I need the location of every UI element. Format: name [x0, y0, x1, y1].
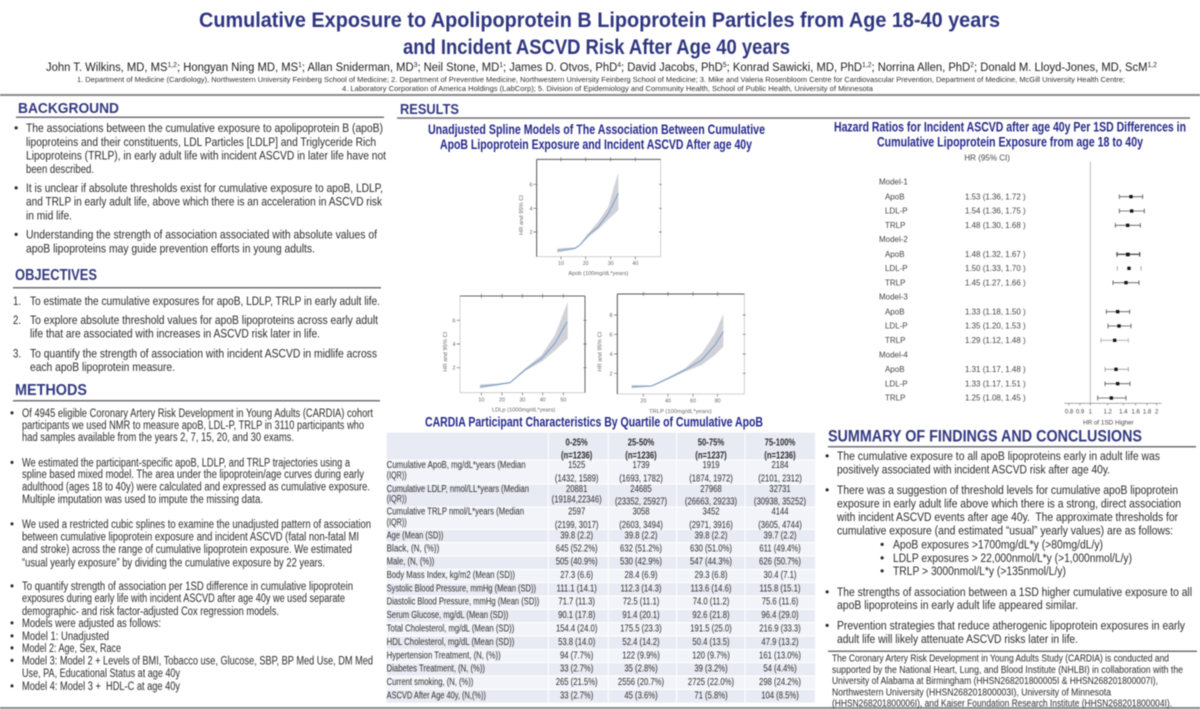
chart: forest plot of hazard ratios: [879, 153, 1162, 426]
table: participant characteristics: (n=1236): [561, 449, 592, 461]
text block: objectives list: 1.: [13, 294, 21, 308]
chart: forest plot of hazard ratios: 1.48 (1.32, 1.67 ): [965, 250, 1026, 259]
text block: methods bullets: To quantify strength of association per 1SD difference in cumulative lipoprotein: [22, 581, 353, 593]
chart: LDLp spline: 2: [453, 366, 456, 372]
authors: 1,2: [167, 62, 177, 69]
chart: forest plot of hazard ratios: 1.35 (1.20, 1.53 ): [965, 322, 1026, 331]
table: participant characteristics: Cumulative ApoB, mg/dL*years (Median: [387, 460, 526, 471]
table: participant characteristics: 120 (9.7%): [692, 649, 730, 661]
text block: objectives list: 2.: [13, 313, 21, 327]
table: participant characteristics: (2101, 2312): [758, 472, 802, 484]
authors: ; Norrina Allen, PhD: [872, 62, 970, 74]
panel: background: [14, 101, 387, 256]
text block: methods bullets: •: [10, 681, 14, 693]
table: participant characteristics: Total Cholesterol, mg/dL (Mean (SD)): [387, 623, 514, 634]
text block: methods bullets: •: [10, 519, 14, 531]
chart: TRLP spline: 20: [640, 399, 646, 405]
text block: objectives list: life that are associated with increases in ASCVD risk later in life.: [30, 326, 320, 340]
chart: TRLP spline: 2: [610, 371, 613, 377]
table: participant characteristics: 27.3 (6.6): [560, 569, 593, 580]
chart: TRLP spline: TRLP (100mg/dL*years): [649, 409, 712, 415]
authors: 2: [970, 62, 974, 69]
table: participant characteristics: 39.8 (2.2): [695, 529, 727, 541]
table: participant characteristics: (n=1237): [695, 449, 727, 461]
table: participant characteristics: 33 (2.7%): [560, 690, 593, 701]
chart: forest plot of hazard ratios: 1.54 (1.36, 1.75 ): [965, 207, 1026, 216]
chart: ApoB spline: [519, 157, 662, 277]
panel: summary and conclusions: [825, 428, 1197, 709]
table: participant characteristics: (30938, 35252): [754, 496, 806, 507]
text block: methods bullets: Of 4945 eligible Coronary Artery Risk Development in Young Adults (CARDIA) cohort: [22, 408, 374, 420]
panel: results: [387, 102, 1190, 703]
text block: summary bullets: positively associated with incident ASCVD risk after age 40y.: [837, 462, 1110, 476]
table: participant characteristics: (1432, 1589): [555, 472, 598, 484]
table: participant characteristics: Black, (N, (%)): [387, 543, 439, 554]
heading: objectives: OBJECTIVES: [15, 267, 97, 284]
table: participant characteristics: 630 (51.0%): [690, 542, 732, 554]
text block: summary bullets: •: [825, 483, 829, 497]
authors: 1: [499, 62, 503, 69]
table: participant characteristics: 611 (49.4%): [759, 542, 801, 554]
text block: background bullets: Understanding the strength of association associated with absolute values of: [26, 228, 378, 242]
chart: TRLP spline: HR and 95% CI: [598, 332, 604, 372]
text block: methods bullets: and stroke) across the range of cumulative lipoprotein exposure. We estimated: [22, 544, 352, 556]
table: participant characteristics: (2971, 3916): [689, 519, 733, 530]
chart: forest plot of hazard ratios: LDL-P: [885, 379, 908, 388]
text block: summary bullets: LDLP exposures > 22,000nmol/L*y (>1,000nmol/L/y): [893, 551, 1132, 565]
subheading: spline models: Unadjusted Spline Models of The Association Between Cumulative: [428, 122, 765, 137]
chart: forest plot of hazard ratios: ApoB: [885, 192, 905, 201]
chart: forest plot of hazard ratios: HR (95% CI): [964, 153, 1010, 162]
authors: ; Hongyan Ning MD, MS: [177, 62, 298, 74]
table: participant characteristics: 71 (5.8%): [694, 690, 728, 701]
table: participant characteristics: 216.9 (33.3): [759, 622, 801, 634]
authors: 1,2: [1147, 62, 1157, 69]
chart: forest plot of hazard ratios: 1.48 (1.30, 1.68 ): [965, 221, 1026, 230]
table: participant characteristics: Cumulative TRLP nmol/L*years (Median: [387, 507, 524, 518]
chart: ApoB spline: 6: [530, 182, 533, 188]
text block: summary bullets: •: [825, 618, 829, 632]
chart: LDLp spline: 40: [540, 397, 546, 403]
chart: forest plot of hazard ratios: 1.50 (1.33, 1.70 ): [965, 264, 1026, 273]
table: participant characteristics: 50-75%: [698, 437, 724, 448]
chart: TRLP spline: 8: [610, 313, 613, 319]
table: participant characteristics: 645 (52.2%): [556, 542, 598, 554]
table: participant characteristics: 3452: [702, 506, 720, 517]
chart: forest plot of hazard ratios: 1.31 (1.17, 1.48 ): [965, 365, 1026, 374]
authors: 1,2: [862, 62, 872, 69]
chart: TRLP spline: 6: [610, 332, 613, 338]
chart: forest plot of hazard ratios: Model-3: [879, 293, 908, 302]
text block: methods bullets: between cumulative lipoprotein exposure and incident ASCVD (fatal non-fatal MI: [22, 532, 359, 544]
table: participant characteristics: 71.7 (11.3): [558, 596, 595, 607]
text block: methods bullets: •: [10, 618, 14, 630]
text block: summary bullets: ApoB exposures >1700mg/dL*y (>80mg/dL/y): [893, 538, 1103, 552]
chart: forest plot of hazard ratios: TRLP: [885, 394, 905, 403]
table: participant characteristics: 28.4 (6.9): [625, 569, 657, 580]
table: participant characteristics: Cumulative LDLP, nmol/LL*years (Median: [387, 484, 529, 495]
text block: background bullets: apoB lipoproteins may guide prevention efforts in young adults.: [26, 242, 315, 256]
heading: results: RESULTS: [400, 102, 459, 118]
heading: background: BACKGROUND: [18, 101, 119, 117]
chart: forest plot of hazard ratios: 1.25 (1.08, 1.45 ): [965, 394, 1026, 403]
text block: objectives list: 3.: [13, 346, 21, 360]
text block: methods bullets: •: [10, 656, 14, 668]
chart: forest plot of hazard ratios: Model-2: [879, 235, 908, 244]
text block: summary bullets: •: [825, 449, 829, 463]
chart: ApoB spline: HR and 95% CI: [519, 195, 525, 235]
chart: LDLp spline: 50: [560, 397, 566, 403]
chart: forest plot of hazard ratios: ApoB: [885, 307, 905, 316]
chart: LDLp spline: 4: [453, 342, 456, 348]
text block: methods bullets: participants we used NMR to measure apoB, LDL-P, TRLP in 3110 participants who: [22, 420, 364, 432]
chart: TRLP spline: 80: [715, 399, 721, 405]
table: participant characteristics: (19184,22346): [552, 493, 602, 505]
affiliations: [77, 75, 1125, 93]
table: participant characteristics: 54 (4.4%): [763, 663, 797, 674]
text block: methods bullets: We estimated the participant-specific apoB, LDLP, and TRLP trajectories using a: [22, 458, 350, 470]
subheading: hazard ratios: [834, 120, 1186, 150]
text block: objectives list: [13, 294, 380, 374]
table: participant characteristics: (2603, 3494): [619, 519, 663, 530]
table: participant characteristics: 175.5 (23.3): [620, 622, 662, 634]
chart: ApoB spline: Apob (100mg/dL*years): [568, 271, 629, 277]
table: participant characteristics: 75.6 (11.6): [762, 596, 798, 607]
table: participant characteristics: 1919: [702, 459, 720, 470]
table: participant characteristics: 39 (3.2%): [694, 663, 728, 674]
table: participant characteristics: (23352, 25927): [615, 496, 667, 507]
chart: ApoB spline: 40: [632, 261, 638, 267]
table: participant characteristics: 161 (13.0%): [759, 649, 801, 661]
table: participant characteristics: 52.4 (14.2): [622, 636, 660, 647]
table: participant characteristics: 50.4 (13.5): [692, 636, 730, 647]
text block: funding acknowledgement: Northwestern University (HHSN268201800003I), University of Minnesota: [832, 687, 1111, 698]
table: participant characteristics: Serum Glucose, mg/dL (Mean (SD)): [387, 610, 508, 621]
chart: LDLp spline: LDLp (1000mg/dL*years): [492, 407, 556, 413]
table: participant characteristics: Male, (N, (%)): [387, 557, 434, 568]
table: participant characteristics: 1525: [568, 459, 585, 470]
text block: objectives list: each apoB lipoprotein measure.: [30, 360, 175, 374]
text block: methods bullets: Model 4: Model 3 + HDL-C at age 40y: [22, 681, 180, 693]
text block: background bullets: •: [14, 121, 18, 135]
text block: methods bullets: Multiple imputation was used to impute the missing data.: [22, 494, 263, 506]
text block: summary bullets: •: [880, 564, 884, 578]
authors: ; Konrad Sawicki, MD, PhD: [727, 62, 862, 74]
table: participant characteristics: Current smoking, (N, (%)): [387, 677, 473, 688]
text block: summary bullets: apoB lipoproteins in early adult life appeared similar.: [837, 598, 1078, 612]
text block: methods bullets: Use, PA, Educational Status at age 40y: [22, 668, 180, 680]
affiliations: 4. Laboratory Corporation of America Holdings (LabCorp); 5. Division of Epidemiology and Community Health, School of Public Health, University of Minnesota: [342, 84, 874, 93]
table: participant characteristics: Diastolic Blood Pressure, mmHg (Mean (SD)): [387, 597, 539, 608]
table: participant characteristics: 113.6 (14.6): [691, 582, 731, 594]
table: participant characteristics: (3605, 4744): [758, 519, 802, 530]
chart: forest plot of hazard ratios: 1: [1089, 410, 1093, 416]
table: participant characteristics: 94 (7.7%): [560, 649, 593, 661]
table: participant characteristics: 30.4 (7.1): [764, 569, 796, 580]
panel: objectives: [13, 267, 381, 374]
text block: summary bullets: [825, 449, 1192, 646]
authors: John T. Wilkins, MD, MS: [46, 62, 170, 74]
table: participant characteristics: 47.9 (13.2): [761, 636, 799, 647]
text block: background bullets: The associations between the cumulative exposure to apolipoprotein B (apoB): [26, 121, 383, 135]
chart: forest plot of hazard ratios: ApoB: [885, 250, 905, 259]
text block: methods bullets: Model 2: Age, Sex, Race: [22, 643, 121, 655]
table: participant characteristics: 154.4 (24.0): [556, 622, 597, 634]
table: participant characteristics: 91.4 (20.1): [622, 609, 660, 620]
table: participant characteristics: 3058: [632, 506, 650, 517]
table: participant characteristics: 265 (21.5%): [556, 676, 598, 687]
chart: forest plot of hazard ratios: HR of 1SD Higher: [1083, 419, 1134, 426]
text block: methods bullets: had samples available from the years 2, 7, 15, 20, and 30 exams.: [22, 432, 294, 444]
chart: forest plot of hazard ratios: 1.45 (1.27, 1.66 ): [965, 278, 1026, 287]
text block: background bullets: in mid life.: [26, 208, 72, 222]
text block: objectives list: To quantify the strength of association with incident ASCVD in midlife across: [30, 346, 377, 360]
chart: LDLp spline: 10: [478, 397, 484, 403]
table: participant characteristics: 122 (9.9%): [622, 649, 660, 661]
chart: forest plot of hazard ratios: LDL-P: [885, 322, 908, 331]
title: [199, 9, 1000, 59]
table: participant characteristics: (1874, 1972): [689, 472, 733, 484]
text block: summary bullets: TRLP > 3000nmol/L*y (>135nmol/L/y): [893, 564, 1066, 578]
table: participant characteristics: 112.3 (14.3): [621, 582, 661, 594]
table: participant characteristics: 104 (8.5%): [761, 690, 799, 701]
chart: forest plot of hazard ratios: TRLP: [885, 221, 905, 230]
text block: summary bullets: adult life will likely attenuate ASCVD risks later in life.: [837, 632, 1078, 646]
chart: LDLp spline: HR and 95% CI: [443, 332, 449, 372]
text block: methods bullets: •: [10, 581, 14, 593]
table: participant characteristics: 96.4 (29.0): [761, 609, 799, 620]
authors: 4: [617, 62, 621, 69]
chart: TRLP spline: 40: [665, 399, 671, 405]
text block: objectives list: To explore absolute threshold values for apoB lipoproteins across early adult: [30, 313, 379, 327]
chart: TRLP spline: 4: [610, 352, 613, 358]
text block: methods bullets: Model 3: Model 2 + Levels of BMI, Tobacco use, Glucose, SBP, BP Med Use, DM Med: [22, 656, 373, 668]
table: participant characteristics: 191.5 (25.0): [690, 622, 732, 634]
table: participant characteristics: (IQR)): [387, 517, 407, 528]
chart: forest plot of hazard ratios: ApoB: [885, 365, 905, 374]
chart: forest plot of hazard ratios: TRLP: [885, 278, 905, 287]
authors: ; James D. Otvos, PhD: [503, 62, 617, 74]
text block: background bullets: and TRLP in early adult life, above which there is an acceleration in ASCVD risk: [26, 194, 383, 208]
table: participant characteristics: Systolic Blood Pressure, mmHg (Mean (SD)): [387, 583, 536, 594]
table: participant characteristics: 547 (44.3%): [690, 556, 732, 567]
authors: 5: [723, 62, 727, 69]
table: participant characteristics: 74.0 (11.2): [693, 596, 729, 607]
table: participant characteristics: 90.1 (17.8): [558, 609, 595, 620]
chart: forest plot of hazard ratios: 1.2: [1103, 410, 1112, 416]
table: participant characteristics: 4144: [771, 506, 789, 517]
authors: 3: [414, 62, 418, 69]
table: participant characteristics: 20881: [566, 483, 587, 494]
text block: summary bullets: •: [880, 538, 884, 552]
table: participant characteristics: 75-100%: [765, 437, 795, 448]
text block: methods bullets: demographic- and risk factor-adjusted Cox regression models.: [22, 606, 279, 618]
table: participant characteristics: [387, 433, 815, 703]
table: participant characteristics: 298 (24.2%): [759, 676, 801, 687]
text block: methods bullets: “usual yearly exposure” by dividing the cumulative exposure by 22 years.: [22, 558, 325, 570]
chart: forest plot of hazard ratios: 1.6: [1131, 410, 1140, 416]
chart: forest plot of hazard ratios: 1.33 (1.17, 1.51 ): [965, 379, 1026, 388]
table: participant characteristics: 25-50%: [628, 437, 654, 448]
chart: forest plot of hazard ratios: 1.29 (1.12, 1.48 ): [965, 336, 1026, 345]
table: participant characteristics: 2556 (20.7%): [618, 676, 664, 687]
chart: LDLp spline: 20: [499, 397, 505, 403]
table: participant characteristics: 530 (42.9%): [620, 556, 662, 567]
text block: methods bullets: We used a restricted cubic splines to examine the unadjusted pattern of association: [22, 519, 371, 531]
title: Cumulative Exposure to Apolipoprotein B Lipoprotein Particles from Age 18-40 years: [199, 9, 1000, 32]
authors: ; Neil Stone, MD: [417, 62, 499, 74]
subheading: spline models: ApoB Lipoprotein Exposure and Incident ASCVD After age 40y: [440, 137, 752, 152]
chart: ApoB spline: 10: [558, 261, 564, 267]
chart: forest plot of hazard ratios: 1.53 (1.36, 1.72 ): [965, 192, 1026, 201]
table: participant characteristics: 39.8 (2.2): [560, 529, 593, 541]
table: participant characteristics: 2725 (22.0%): [688, 676, 734, 687]
text block: background bullets: •: [14, 181, 18, 195]
text block: background bullets: Lipoproteins (TRLP), in early adult life with incident ASCVD in later life have not: [26, 148, 387, 162]
authors: ; Allan Sniderman, MD: [302, 62, 414, 74]
subheading: spline models: [428, 122, 765, 152]
affiliations: 1. Department of Medicine (Cardiology), Northwestern University Feinberg School of Medicine; 2. Department of Preventive Medicine, Northwestern University Feinberg School of Medicine; 3. Mike and Valeria Rosenbloom Centre for Cardiovascular Prevention, Department of Medicine, McGill University Health Centre;: [77, 75, 1125, 84]
chart: ApoB spline: 30: [608, 261, 614, 267]
table: participant characteristics: 32731: [769, 483, 791, 494]
chart: TRLP spline: [598, 292, 746, 415]
table: participant characteristics: ASCVD After Age 40y, (N,(%)): [387, 691, 486, 702]
text block: background bullets: [14, 121, 387, 256]
panel: methods: [10, 382, 380, 693]
table: participant characteristics: 1739: [632, 459, 650, 470]
chart: forest plot of hazard ratios: 1.4: [1119, 410, 1128, 416]
table: participant characteristics: (2199, 3017): [555, 519, 598, 530]
table: participant characteristics: (IQR)): [387, 494, 407, 505]
chart: forest plot of hazard ratios: LDL-P: [885, 207, 908, 216]
chart: forest plot of hazard ratios: TRLP: [885, 336, 905, 345]
chart: forest plot of hazard ratios: Model-4: [879, 350, 908, 359]
text block: methods bullets: [10, 408, 374, 693]
text block: background bullets: lipoproteins and their constituents, LDL Particles [LDLP] and Triglyceride Rich: [26, 135, 376, 149]
text block: objectives list: To estimate the cumulative exposures for apoB, LDLP, TRLP in early adult life.: [30, 294, 380, 308]
text block: methods bullets: •: [10, 643, 14, 655]
table: participant characteristics: 45 (3.6%): [624, 690, 658, 701]
table: participant characteristics: (n=1236): [625, 449, 657, 461]
authors: 1: [298, 62, 302, 69]
chart: forest plot of hazard ratios: LDL-P: [885, 264, 908, 273]
text block: background bullets: •: [14, 228, 18, 242]
table: participant characteristics: 72.5 (11.1): [623, 596, 659, 607]
text block: methods bullets: Model 1: Unadjusted: [22, 631, 109, 643]
table: participant characteristics: 115.8 (15.1): [760, 582, 800, 594]
chart: LDLp spline: [443, 294, 587, 413]
text block: methods bullets: exposures during early life with incident ASCVD after age 40y we used separate: [22, 593, 345, 605]
chart: forest plot of hazard ratios: 0.8: [1065, 410, 1074, 416]
table: participant characteristics: 29.3 (6.8): [695, 569, 727, 580]
text block: summary bullets: •: [880, 551, 884, 565]
table: participant characteristics: 53.8 (14.0): [558, 636, 595, 647]
subheading: characteristics table: CARDIA Participant Characteristics By Quartile of Cumulative ApoB: [425, 415, 763, 430]
table: participant characteristics: (IQR)): [387, 471, 407, 482]
table: participant characteristics: (1693, 1782): [619, 472, 663, 484]
chart: forest plot of hazard ratios: 1.33 (1.18, 1.50 ): [965, 307, 1026, 316]
chart: TRLP spline: 60: [690, 399, 696, 405]
table: participant characteristics: Age (Mean (SD)): [387, 530, 443, 541]
chart: LDLp spline: 30: [519, 397, 525, 403]
chart: forest plot of hazard ratios: 0.9: [1076, 410, 1085, 416]
authors: ; David Jacobs, PhD: [621, 62, 723, 74]
table: participant characteristics: 35 (2.8%): [624, 663, 658, 674]
table: participant characteristics: 111.1 (14.1): [557, 582, 597, 594]
chart: ApoB spline: 2: [530, 230, 533, 236]
table: participant characteristics: 505 (40.9%): [556, 556, 598, 567]
chart: ApoB spline: 20: [583, 261, 589, 267]
text block: background bullets: been described.: [26, 162, 94, 176]
table: participant characteristics: 626 (50.7%): [759, 556, 801, 567]
chart: forest plot of hazard ratios: 2: [1155, 410, 1159, 416]
text block: methods bullets: •: [10, 458, 14, 470]
text block: methods bullets: adulthood (ages 18 to 40y) were calculated and expressed as cumulative exposure.: [22, 482, 370, 494]
table: participant characteristics: 92.6 (21.8): [692, 609, 730, 620]
table: participant characteristics: 24685: [630, 483, 652, 494]
table: participant characteristics: HDL Cholesterol, mg/dL (Mean (SD)): [387, 637, 514, 648]
chart: forest plot of hazard ratios: 1.8: [1143, 410, 1152, 416]
table: participant characteristics: 33 (2.7%): [560, 663, 593, 674]
table: participant characteristics: (n=1236): [764, 449, 796, 461]
heading: summary: SUMMARY OF FINDINGS AND CONCLUSIONS: [828, 428, 1142, 446]
text block: background bullets: It is unclear if absolute thresholds exist for cumulative exposure to apoB, LDLP,: [26, 181, 383, 195]
text block: methods bullets: spline based mixed model. The area under the lipoprotein/age curves during early: [22, 469, 364, 481]
text block: methods bullets: Models were adjusted as follows:: [22, 618, 161, 630]
table: participant characteristics: 27968: [700, 483, 722, 494]
table: participant characteristics: 632 (51.2%): [620, 542, 662, 554]
text block: summary bullets: •: [825, 585, 829, 599]
heading: methods: METHODS: [15, 382, 87, 399]
chart: forest plot of hazard ratios: Model-1: [879, 177, 908, 186]
table: participant characteristics: 0-25%: [566, 437, 588, 448]
table: participant characteristics: 39.7 (2.2): [764, 529, 796, 541]
text block: methods bullets: •: [10, 631, 14, 643]
table: participant characteristics: Hypertension Treatment, (N, (%)): [387, 650, 501, 661]
text block: funding acknowledgement: [832, 654, 1183, 709]
table: participant characteristics: 2597: [568, 506, 585, 517]
title: and Incident ASCVD Risk After Age 40 years: [403, 36, 790, 59]
table: participant characteristics: (26663, 29233): [685, 496, 737, 507]
table: participant characteristics: 2184: [771, 459, 789, 470]
chart: ApoB spline: 4: [530, 206, 533, 212]
table: participant characteristics: 39.8 (2.2): [625, 529, 657, 541]
authors: ; Donald M. Lloyd-Jones, MD, ScM: [974, 62, 1147, 74]
text block: methods bullets: •: [10, 408, 14, 420]
table: participant characteristics: Body Mass Index, kg/m2 (Mean (SD)): [387, 570, 515, 581]
chart: LDLp spline: 6: [453, 318, 456, 324]
table: participant characteristics: Diabetes Treatment, (N, (%)): [387, 664, 485, 675]
